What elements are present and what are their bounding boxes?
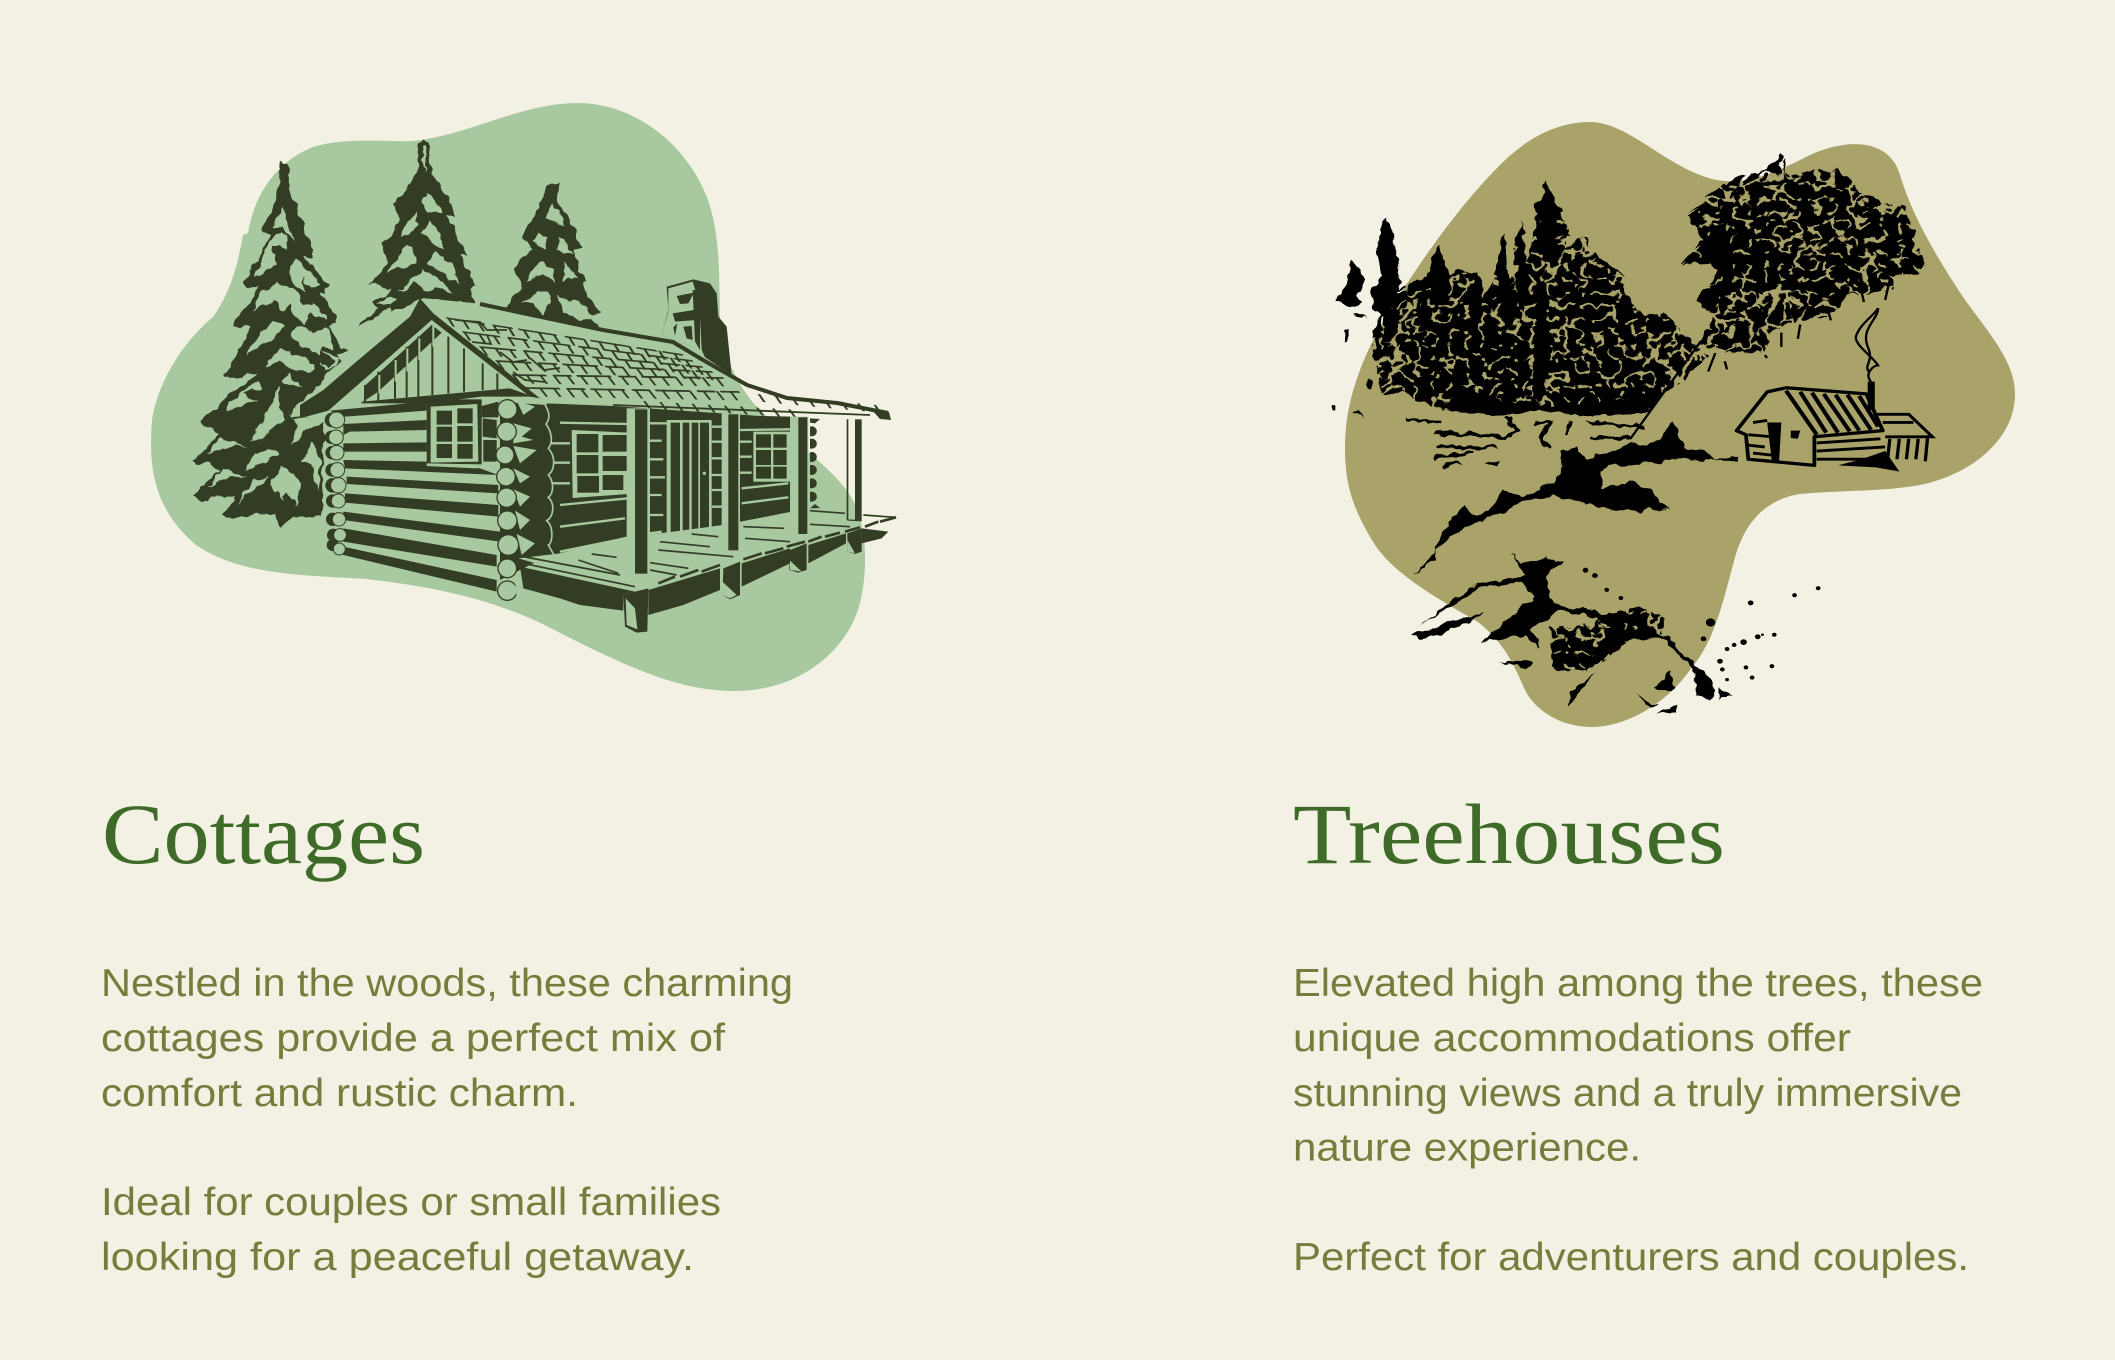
- shore banks: [1413, 422, 1739, 576]
- text block: cottages description: [101, 962, 793, 1279]
- panel: cottages: [101, 103, 896, 1279]
- heading: Cottages: Cottages: [102, 786, 425, 882]
- text block: cottages description: looking for a peaceful getaway.: [101, 1236, 694, 1279]
- text block: treehouses description: stunning views and a truly immersive: [1293, 1072, 1962, 1115]
- porch with floor and posts: [518, 408, 896, 633]
- far log ends: [810, 418, 820, 508]
- panel: treehouses: [1293, 122, 2015, 1279]
- hill trunk strokes: [1630, 280, 1890, 439]
- text block: cottages description: cottages provide a perfect mix of: [101, 1017, 725, 1060]
- text block: treehouses description: unique accommodations offer: [1293, 1017, 1851, 1060]
- text block: treehouses description: Perfect for adventurers and couples.: [1293, 1236, 1969, 1279]
- gable end: [300, 298, 540, 418]
- green blob background: [151, 103, 865, 691]
- forest and tree canopy texture: [1371, 153, 1928, 671]
- front window: [572, 430, 628, 498]
- door: [667, 420, 712, 534]
- heading: Treehouses: Treehouses: [1293, 786, 1725, 882]
- log wall and corner ends: [325, 399, 554, 600]
- text block: treehouses description: Elevated high among the trees, these: [1293, 962, 1983, 1005]
- icon: middle pine tree: [360, 138, 475, 323]
- solid ink details: [1332, 180, 1739, 714]
- porch posts: [627, 408, 862, 575]
- sharp ink details: [1583, 280, 1932, 681]
- icon: right pine tree: [502, 182, 602, 330]
- icon: stone chimney: [662, 279, 732, 375]
- right corner log ends: [496, 400, 554, 600]
- dense forest base: [1442, 222, 1734, 416]
- icon: left pine tree: [192, 162, 347, 527]
- roof with shingles: [422, 298, 893, 420]
- illustration: forest landscape with cabin: [1332, 153, 1932, 714]
- small cabin in the clearing: [1737, 308, 1932, 471]
- text block: cottages description: Nestled in the woods, these charming: [101, 962, 793, 1005]
- lake reflections: [1406, 418, 1644, 467]
- olive blob background: [1345, 122, 2015, 727]
- front wall, windows and door: [547, 403, 820, 558]
- conifer tops: [1332, 180, 1571, 420]
- scattered ink flecks: [1583, 568, 1821, 681]
- text block: cottages description: Ideal for couples or small families: [101, 1181, 721, 1224]
- text block: cottages description: comfort and rustic charm.: [101, 1072, 578, 1115]
- illustration: log cabin with pine trees: [192, 138, 896, 633]
- window on log wall: [427, 399, 482, 468]
- lower tree and rocks: [1411, 553, 1732, 714]
- text block: treehouses description: [1293, 962, 1983, 1279]
- right window: [753, 432, 792, 482]
- left log ends: [325, 412, 346, 555]
- text block: treehouses description: nature experience.: [1293, 1126, 1641, 1170]
